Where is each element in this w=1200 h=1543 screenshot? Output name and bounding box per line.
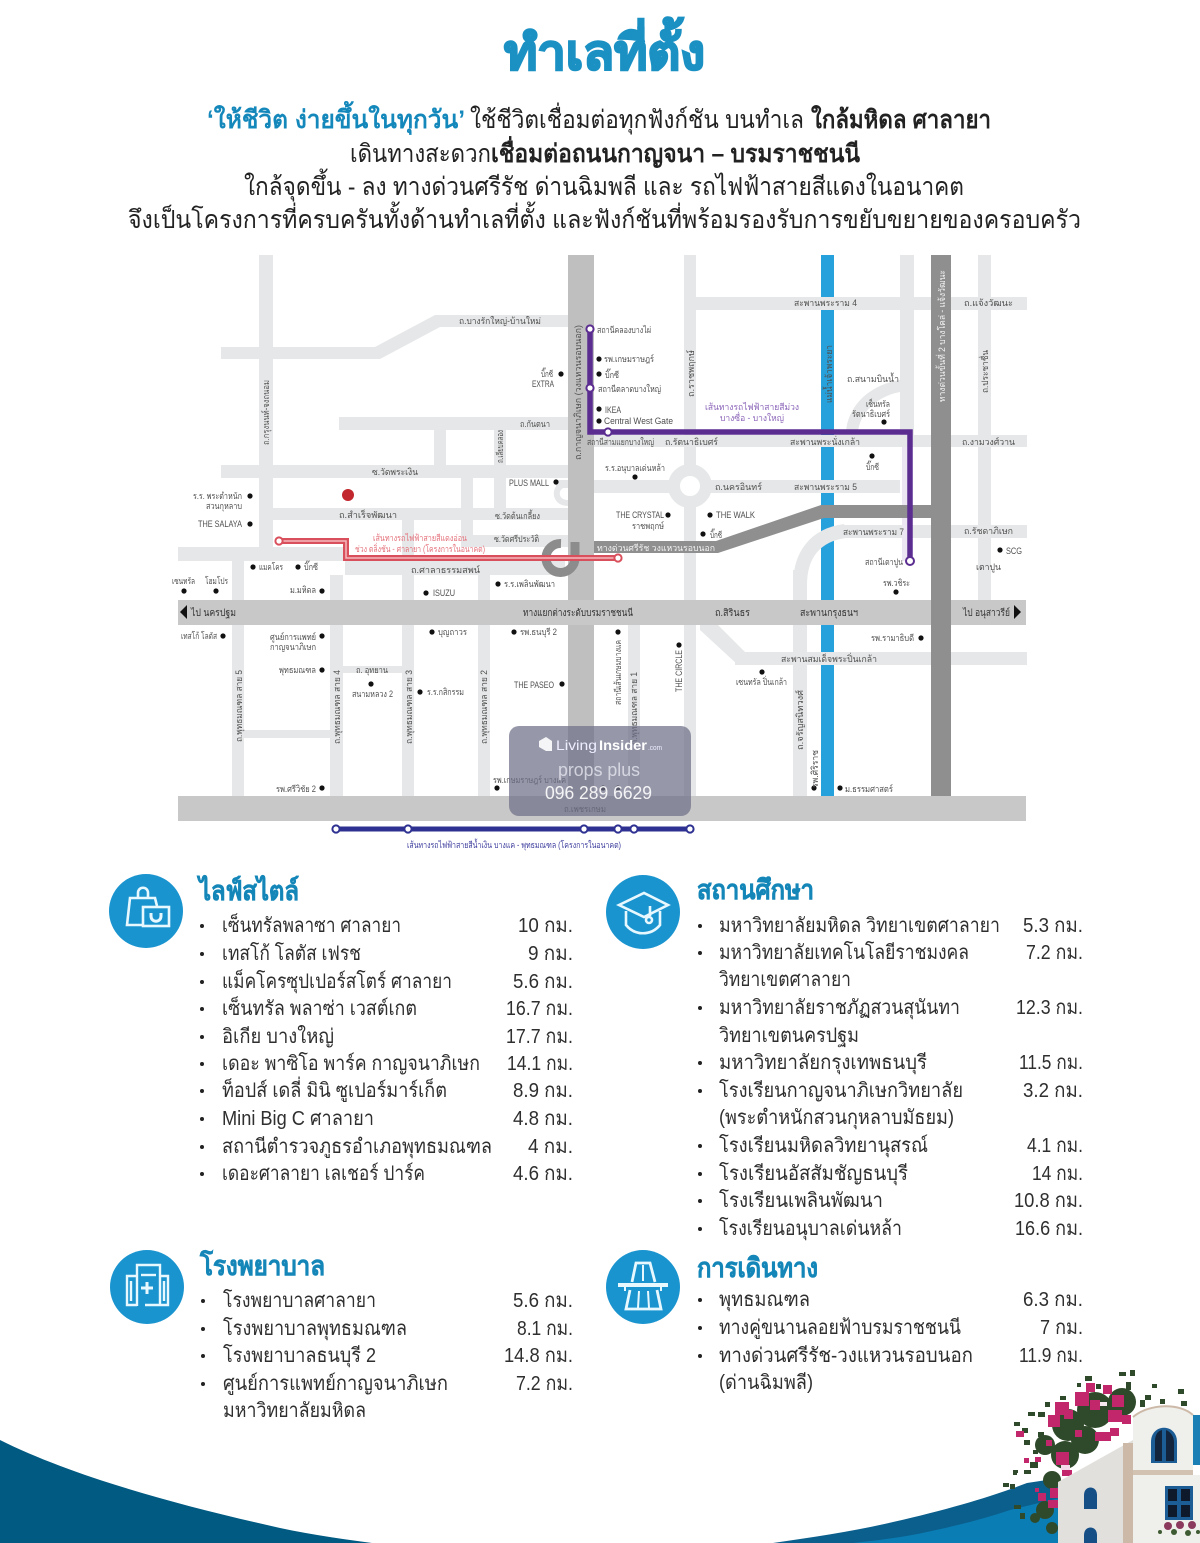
house windows: [1151, 1428, 1177, 1463]
map: horizontal labels: ถ.รัชดาภิเษก: [964, 526, 1013, 536]
map: horizontal labels: [172, 298, 1022, 814]
watermark: 096 289 6629: [545, 783, 652, 803]
map: horizontal labels: IKEA: [605, 405, 621, 415]
map: blue line: เส้นทางรถไฟฟ้าสายสีน้ำเงิน บางแค - พุทธมณฑล (โครงการในอนาคต): [407, 838, 621, 851]
map: horizontal labels: รัตนาธิเบศร์: [852, 408, 890, 419]
map: horizontal labels: ไป นครปฐม: [190, 607, 236, 619]
map: horizontal labels: เซ็นทรัล: [866, 397, 890, 409]
map: horizontal labels: THE SALAYA: [198, 519, 242, 529]
map: horizontal labels: รพ.เกษมราษฎร์ บางแค: [493, 774, 566, 785]
list: hospitals: [201, 1289, 573, 1422]
map: horizontal labels: ถ. อุทยาน: [356, 665, 388, 676]
icon: hospital building: [110, 1250, 184, 1324]
list: hospitals: โรงพยาบาลพุทธมณฑล: [223, 1317, 407, 1341]
map: horizontal labels: สถานีคลองบางไผ่: [597, 325, 651, 335]
heading: lifestyle: ไลฟ์สไตล์: [196, 875, 299, 906]
map: project location marker: [342, 489, 354, 501]
list: lifestyle places: เซ็นทรัล พลาซ่า เวสต์เกต: [222, 995, 417, 1020]
map: horizontal labels: SCG: [1006, 546, 1022, 556]
list: hospitals: ศูนย์การแพทย์กาญจนาภิเษก: [223, 1372, 448, 1396]
watermark: props plus: [558, 760, 640, 780]
map: horizontal labels: สะพานพระราม 5: [794, 482, 857, 492]
icon: shopping bags: [109, 874, 183, 948]
map: horizontal labels: สะพานสมเด็จพระปิ่นเกล้า: [781, 652, 877, 664]
map: horizontal labels: สะพานพระราม 7: [843, 527, 904, 537]
list: schools: วิทยาเขตศาลายา: [719, 969, 851, 991]
map: horizontal labels: ร.ร. พระตำหนัก: [193, 491, 242, 501]
map: horizontal labels: EXTRA: [532, 379, 554, 389]
map: horizontal labels: ทางด่วนศรีรัช วงแหวนรอบนอก: [597, 543, 715, 553]
map: red line: ช่วง ตลิ่งชัน - ศาลายา (โครงการในอนาคต): [355, 542, 485, 554]
list: schools: 12.3 กม.: [1016, 997, 1083, 1019]
map: horizontal labels: ถ.รัตนาธิเบศร์: [665, 436, 718, 447]
list: schools: มหาวิทยาลัยเทคโนโลยีราชมงคล: [719, 941, 969, 964]
map: horizontal labels: THE PASEO: [514, 680, 554, 690]
map: purple line: เส้นทางรถไฟฟ้าสายสีม่วง: [705, 402, 799, 412]
list: hospitals: โรงพยาบาลศาลายา: [223, 1289, 376, 1312]
map: horizontal labels: ทางแยกต่างระดับบรมราชชนนี: [523, 607, 633, 619]
map: vertical labels: ถ.กาญจนาภิเษก (วงแหวนรอบนอก): [573, 325, 583, 460]
map: horizontal labels: กาญจนาภิเษก: [270, 642, 316, 652]
list: schools: มหาวิทยาลัยราชภัฏสวนสุนันทา: [719, 997, 960, 1020]
list: transport: [698, 1289, 1083, 1394]
map: horizontal labels: สะพานกรุงธนฯ: [800, 608, 858, 619]
map: place dots: [181, 356, 1003, 791]
map: horizontal labels: ถ.สิรินธร: [715, 608, 751, 619]
map: horizontal labels: ซ.วัดพระเงิน: [372, 467, 418, 477]
list: hospitals: 14.8 กม.: [504, 1345, 573, 1367]
map: horizontal labels: ซ.วัดต้นเกลี้ยง: [495, 509, 540, 521]
list: lifestyle places: 5.6 กม.: [513, 971, 573, 993]
map: vertical labels: THE CIRCLE: [674, 650, 684, 692]
map: horizontal labels: แมคโคร: [259, 562, 283, 572]
list: schools: 14 กม.: [1032, 1163, 1083, 1185]
map: horizontal labels: ถ.สำเร็จพัฒนา: [339, 508, 397, 520]
list: lifestyle places: 9 กม.: [528, 943, 573, 965]
map: vertical labels: แม่น้ำเจ้าพระยา: [822, 345, 834, 403]
map: vertical labels: ถ.พุทธมณฑล สาย 4: [332, 670, 343, 744]
map: blue line: [332, 825, 694, 851]
map: horizontal labels: เตาปูน: [976, 562, 1001, 573]
map: horizontal labels: รพ.ศรีวิชัย 2: [276, 784, 316, 794]
map: horizontal labels: บิ๊กซี: [304, 560, 318, 572]
map: horizontal labels: PLUS MALL: [509, 478, 549, 488]
list: lifestyle places: 8.9 กม.: [513, 1080, 573, 1102]
list: lifestyle places: 10 กม.: [518, 915, 573, 937]
map: horizontal labels: ราชพฤกษ์: [632, 520, 664, 531]
map: horizontal labels: สถานีสามแยกบางใหญ่: [587, 437, 654, 447]
list: schools: โรงเรียนอนุบาลเด่นหล้า: [719, 1217, 902, 1241]
list: hospitals: 7.2 กม.: [516, 1373, 573, 1395]
list: schools: 4.1 กม.: [1027, 1135, 1083, 1157]
house walls: [1058, 1440, 1133, 1543]
map: horizontal labels: สะพานพระนั่งเกล้า: [790, 435, 860, 447]
intro text block: จึงเป็นโครงการที่ครบครันทั้งด้านทำเลที่ตั้ง และฟังก์ชันที่พร้อมรองรับการขยับขยายของครอบครัว: [128, 201, 1081, 234]
map: horizontal labels: THE WALK: [716, 510, 755, 520]
list: lifestyle places: อิเกีย บางใหญ่: [222, 1025, 334, 1048]
list: transport: พุทธมณฑล: [719, 1289, 810, 1312]
list: schools: [698, 915, 1083, 1241]
intro text block: ใกล้จุดขึ้น - ลง ทางด่วนศรีรัช ด่านฉิมพลี และ รถไฟฟ้าสายสีแดงในอนาคต: [244, 168, 964, 202]
map: horizontal labels: โฮมโปร: [205, 576, 228, 586]
map: horizontal labels: ม.ธรรมศาสตร์: [845, 783, 893, 794]
panel: hospitals: [110, 1249, 573, 1422]
map: road arrows: [180, 605, 1021, 619]
list: schools: 16.6 กม.: [1015, 1218, 1083, 1240]
list: lifestyle places: Mini Big C ศาลายา: [222, 1108, 374, 1130]
map: horizontal labels: สวนกุหลาบ: [206, 501, 242, 512]
map: vertical labels: ถ.พุทธมณฑล สาย 1: [629, 672, 640, 745]
map: vertical labels: ทางด่วนขั้นที่ 2 บางโคล่ - แจ้งวัฒนะ: [935, 270, 947, 402]
list: transport: ทางคู่ขนานลอยฟ้าบรมราชชนนี: [719, 1317, 961, 1340]
list: lifestyle places: เซ็นทรัลพลาซา ศาลายา: [222, 912, 401, 937]
map: horizontal labels: ร.ร.เพลินพัฒนา: [504, 579, 555, 589]
map: horizontal labels: รพ.ธนบุรี 2: [520, 627, 557, 638]
intro text block: ใช้ชีวิตเชื่อมต่อทุกฟังก์ชัน บนทำเล: [470, 102, 804, 135]
list: transport: ทางด่วนศรีรัช-วงแหวนรอบนอก: [719, 1345, 973, 1367]
map: horizontal labels: Central West Gate: [604, 416, 673, 426]
illustration: white house with bougainvillea: [1003, 1370, 1200, 1543]
list: hospitals: 8.1 กม.: [517, 1318, 573, 1340]
list: transport: 11.9 กม.: [1019, 1345, 1083, 1367]
map: horizontal labels: ซ.วัดศรีประวัติ: [494, 534, 539, 544]
list: schools: (พระตำหนักสวนกุหลาบมัธยม): [719, 1107, 954, 1130]
map: purple line: บางซื่อ - บางใหญ่: [720, 411, 784, 423]
map: horizontal labels: ถ.ศาลาธรรมสพน์: [411, 564, 480, 575]
list: schools: 7.2 กม.: [1026, 942, 1083, 964]
map: horizontal labels: ถ.งามวงศ์วาน: [962, 436, 1015, 447]
map: vertical labels: ถ.พุทธมณฑล สาย 5: [234, 670, 245, 742]
title: ทำเลที่ตั้ง: [504, 17, 705, 80]
map: horizontal labels: ศูนย์การแพทย์: [270, 631, 316, 643]
map: vertical labels: [234, 270, 990, 788]
map: horizontal labels: ISUZU: [433, 588, 455, 598]
list: hospitals: 5.6 กม.: [513, 1290, 573, 1312]
left bottom wave: [0, 1440, 372, 1543]
watermark: Insider: [599, 737, 648, 753]
map: horizontal labels: บุญถาวร: [438, 627, 467, 638]
intro text block: ‘ให้ชีวิต ง่ายขึ้นในทุกวัน’: [207, 100, 465, 136]
map: horizontal labels: บิ๊กซี: [541, 367, 553, 379]
map: vertical labels: รพ.ศิริราช: [810, 750, 820, 788]
map: vertical labels: ถ.จรัญสนิทวงศ์: [794, 690, 805, 750]
map: horizontal labels: ม.มหิดล: [290, 585, 316, 595]
map: horizontal labels: ไป อนุสาวรีย์: [962, 607, 1010, 619]
watermark: .com: [648, 745, 662, 752]
map: horizontal labels: ถ.กันตนา: [520, 419, 550, 429]
list: schools: โรงเรียนอัสสัมชัญธนบุรี: [719, 1162, 908, 1186]
map: horizontal labels: THE CRYSTAL: [616, 510, 664, 520]
list: transport: 6.3 กม.: [1023, 1289, 1083, 1311]
map: horizontal labels: ถ.สนามบินน้ำ: [847, 372, 899, 384]
watermark: [509, 726, 691, 816]
list: lifestyle places: 4.8 กม.: [513, 1108, 573, 1130]
list: lifestyle places: ท็อปส์ เดลี่ มินิ ซูเปอร์มาร์เก็ต: [222, 1076, 447, 1103]
map: expressway: [546, 255, 951, 796]
map: horizontal labels: เซนทรัล: [172, 576, 195, 586]
map: river: [821, 255, 834, 797]
list: schools: มหาวิทยาลัยกรุงเทพธนบุรี: [719, 1052, 927, 1075]
list: schools: 3.2 กม.: [1023, 1080, 1083, 1102]
map: vertical labels: ถ.เลียบคลอง: [495, 430, 505, 463]
map: horizontal labels: เซนทรัล ปิ่นเกล้า: [736, 675, 787, 687]
map: vertical labels: ถ.ราชพฤกษ์: [685, 350, 696, 397]
list: lifestyle places: 17.7 กม.: [506, 1026, 573, 1048]
location map: [172, 255, 1027, 851]
heading: education: สถานศึกษา: [697, 875, 814, 905]
list: lifestyle places: 16.7 กม.: [506, 998, 573, 1020]
map: horizontal labels: เทสโก้ โลตัส: [181, 631, 217, 641]
list: schools: วิทยาเขตนครปฐม: [719, 1025, 859, 1047]
map: horizontal labels: ร.ร.กสิกรรม: [427, 687, 464, 697]
map: vertical labels: ถ.ประชาชื่น: [978, 350, 990, 393]
map: horizontal labels: รพ.รามาธิบดี: [871, 633, 914, 643]
list: lifestyle places: 4.6 กม.: [513, 1163, 573, 1185]
map: cross roads over river: [556, 297, 1027, 600]
map: horizontal labels: รพ.เกษมราษฎร์: [604, 353, 654, 364]
list: schools: 11.5 กม.: [1019, 1052, 1083, 1074]
map: horizontal labels: บิ๊กซี: [866, 460, 879, 472]
map: horizontal labels: ถ.นครอินทร์: [715, 481, 762, 492]
list: schools: 5.3 กม.: [1023, 915, 1083, 937]
map: purple line: [586, 325, 914, 565]
map: horizontal labels: สนามหลวง 2: [352, 689, 393, 699]
map: horizontal labels: สถานีเตาปูน: [865, 557, 903, 568]
list: lifestyle places: 14.1 กม.: [507, 1053, 573, 1075]
list: schools: โรงเรียนกาญจนาภิเษกวิทยาลัย: [719, 1079, 963, 1102]
map: horizontal labels: สะพานพระราม 4: [794, 298, 857, 308]
list: schools: โรงเรียนเพลินพัฒนา: [719, 1189, 883, 1212]
right bottom wave: [773, 1478, 1060, 1543]
map: vertical labels: สถานีเส้นเกษมบางแค: [613, 640, 623, 705]
map: horizontal labels: รพ.วชิระ: [883, 578, 910, 588]
window flower box: [1158, 1521, 1200, 1536]
map: minor roads: [178, 255, 1027, 797]
map: horizontal labels: บิ๊กซี: [710, 528, 722, 540]
list: schools: โรงเรียนมหิดลวิทยานุสรณ์: [719, 1134, 928, 1158]
list: lifestyle places: เดอะ พาซิโอ พาร์ค กาญจนาภิเษก: [222, 1052, 480, 1075]
list: lifestyle places: สถานีตำรวจภูธรอำเภอพุทธมณฑล: [222, 1136, 492, 1159]
map: horizontal labels: สถานีตลาดบางใหญ่: [598, 384, 661, 394]
list: transport: (ด่านฉิมพลี): [719, 1372, 813, 1394]
list: hospitals: มหาวิทยาลัยมหิดล: [223, 1400, 366, 1422]
map: vertical labels: ถ.กรุงนนท์-จงถนอม: [260, 380, 272, 445]
map: vertical labels: ถ.พุทธมณฑล สาย 3: [404, 670, 415, 744]
list: lifestyle places: [200, 912, 573, 1185]
intro text block: เชื่อมต่อถนนกาญจนา – บรมราชชนนี: [491, 136, 860, 168]
list: schools: 10.8 กม.: [1014, 1190, 1083, 1212]
icon: highway: [606, 1250, 680, 1324]
list: lifestyle places: แม็คโครซุปเปอร์สโตร์ ศาลายา: [222, 968, 452, 994]
panel: transport: [606, 1250, 1083, 1394]
intro text block: ใกล้มหิดล ศาลายา: [811, 104, 991, 134]
intro text block: เดินทางสะดวก: [350, 140, 491, 168]
map: horizontal labels: ร.ร.อนุบาลเด่นหล้า: [605, 463, 665, 474]
list: lifestyle places: เดอะศาลายา เลเชอร์ ปาร์ค: [222, 1162, 425, 1185]
map: vertical labels: ถ.พุทธมณฑล สาย 2: [479, 670, 490, 744]
watermark: Living: [556, 737, 597, 753]
panel: lifestyle: [109, 874, 573, 1185]
list: transport: 7 กม.: [1040, 1317, 1083, 1339]
map: horizontal labels: ถ.บางรักใหญ่-บ้านใหม่: [459, 316, 541, 326]
flowers and foliage: [1003, 1370, 1187, 1534]
map: main roads: [178, 255, 1027, 821]
list: hospitals: โรงพยาบาลธนบุรี 2: [223, 1344, 376, 1368]
heading: hospitals: โรงพยาบาล: [199, 1249, 325, 1281]
list: schools: มหาวิทยาลัยมหิดล วิทยาเขตศาลายา: [719, 915, 1000, 937]
map: horizontal labels: บิ๊กซี: [605, 368, 619, 380]
heading: transport: การเดินทาง: [697, 1253, 818, 1283]
map: horizontal labels: พุทธมณฑล: [279, 665, 316, 676]
panel: education: [606, 875, 1083, 1241]
icon: graduation cap: [606, 875, 680, 949]
map: horizontal labels: ถ.แจ้งวัฒนะ: [964, 298, 1013, 308]
intro text block: [128, 100, 1081, 234]
map: horizontal labels: ถ.เพชรเกษม: [564, 804, 606, 814]
list: lifestyle places: 4 กม.: [528, 1136, 573, 1158]
list: lifestyle places: เทสโก้ โลตัส เฟรช: [222, 942, 361, 965]
map: red line: เส้นทางรถไฟฟ้าสายสีแดงอ่อน: [373, 533, 467, 543]
map: red line: [275, 533, 622, 562]
